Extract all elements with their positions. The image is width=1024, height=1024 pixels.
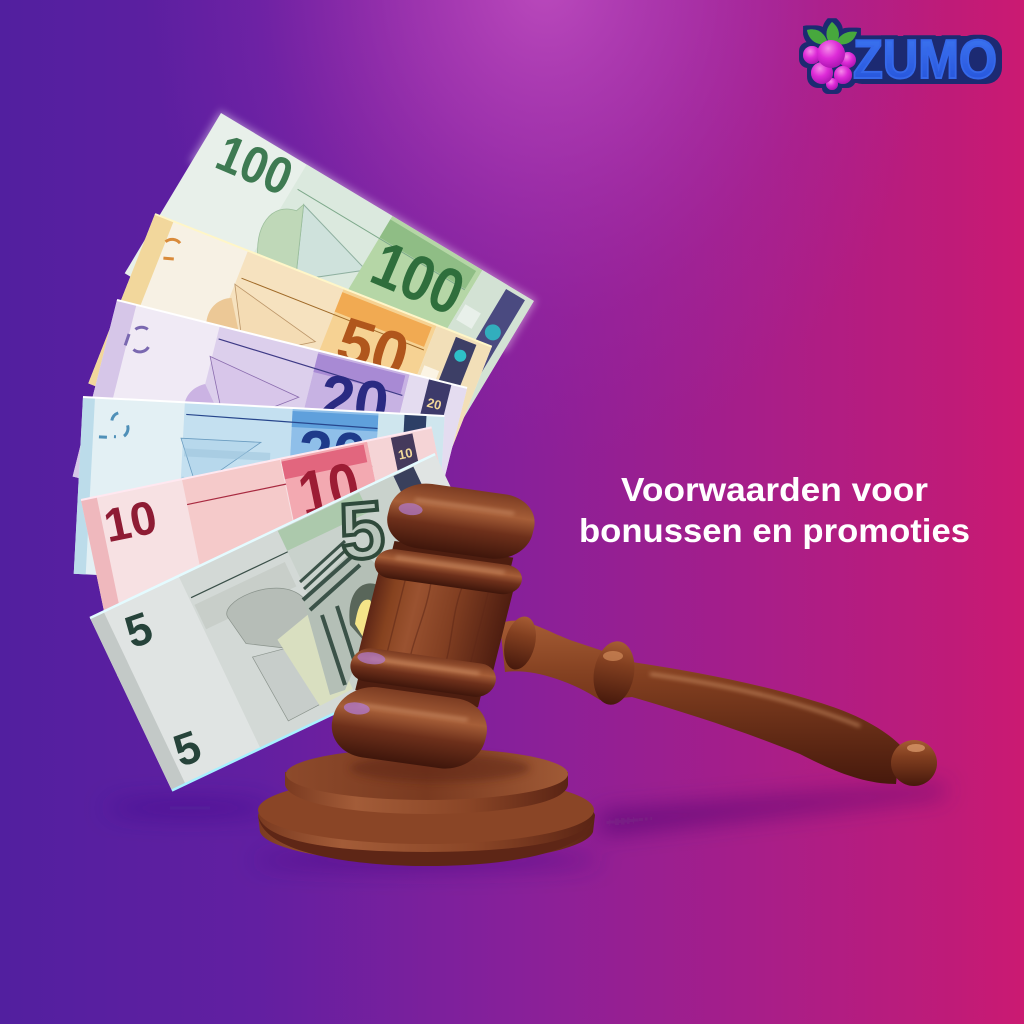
logo berries — [803, 40, 856, 90]
gavel head — [324, 478, 545, 773]
head barrel — [355, 569, 514, 685]
lower band — [347, 646, 500, 699]
upper neck — [392, 541, 513, 569]
banknote: 20 blue — [74, 397, 445, 593]
banknote: 20 purple — [73, 300, 467, 564]
numeral: 10 large: 10 — [292, 448, 366, 531]
heading: Voorwaarden voor — [621, 471, 928, 508]
logo wordmark: ZUMO — [853, 28, 997, 90]
lower neck — [355, 677, 481, 707]
banknote: 5 — [90, 454, 517, 791]
top cap — [381, 479, 541, 563]
numeral: 100 large: 100 — [362, 227, 475, 329]
upper band — [371, 547, 525, 596]
heading — [579, 471, 970, 549]
banknote art: classical building and large 5 — [300, 484, 392, 695]
heading: bonussen en promoties — [579, 512, 970, 549]
banknote fan — [73, 107, 539, 791]
foil numeral: 10: 10 — [397, 445, 414, 463]
gavel sound block — [258, 748, 595, 866]
logo leaves — [807, 22, 857, 46]
numeral: 10 left: 10 — [99, 490, 161, 552]
numeral: 20 blue: 20 — [297, 416, 368, 492]
numeral: 100 left: 100 — [208, 124, 301, 207]
banknote: 50 — [88, 214, 492, 516]
numeral: 5 bottom: 5 — [167, 720, 207, 777]
bottom cap — [324, 682, 494, 773]
numeral: 50: 50 — [329, 302, 418, 394]
logo backing — [850, 40, 998, 80]
foil numeral: 20: 20 — [425, 395, 443, 413]
banknote: 100 — [123, 107, 539, 462]
gavel handle — [499, 613, 937, 786]
logo: Zumo — [803, 22, 998, 90]
banknote: 10 — [81, 427, 468, 676]
banknote art: classical building and large 5: 5 — [336, 484, 388, 577]
numeral: 5 top: 5 — [118, 602, 159, 658]
numeral: 20 purple: 20 — [316, 360, 393, 441]
ground shadows — [105, 786, 945, 868]
